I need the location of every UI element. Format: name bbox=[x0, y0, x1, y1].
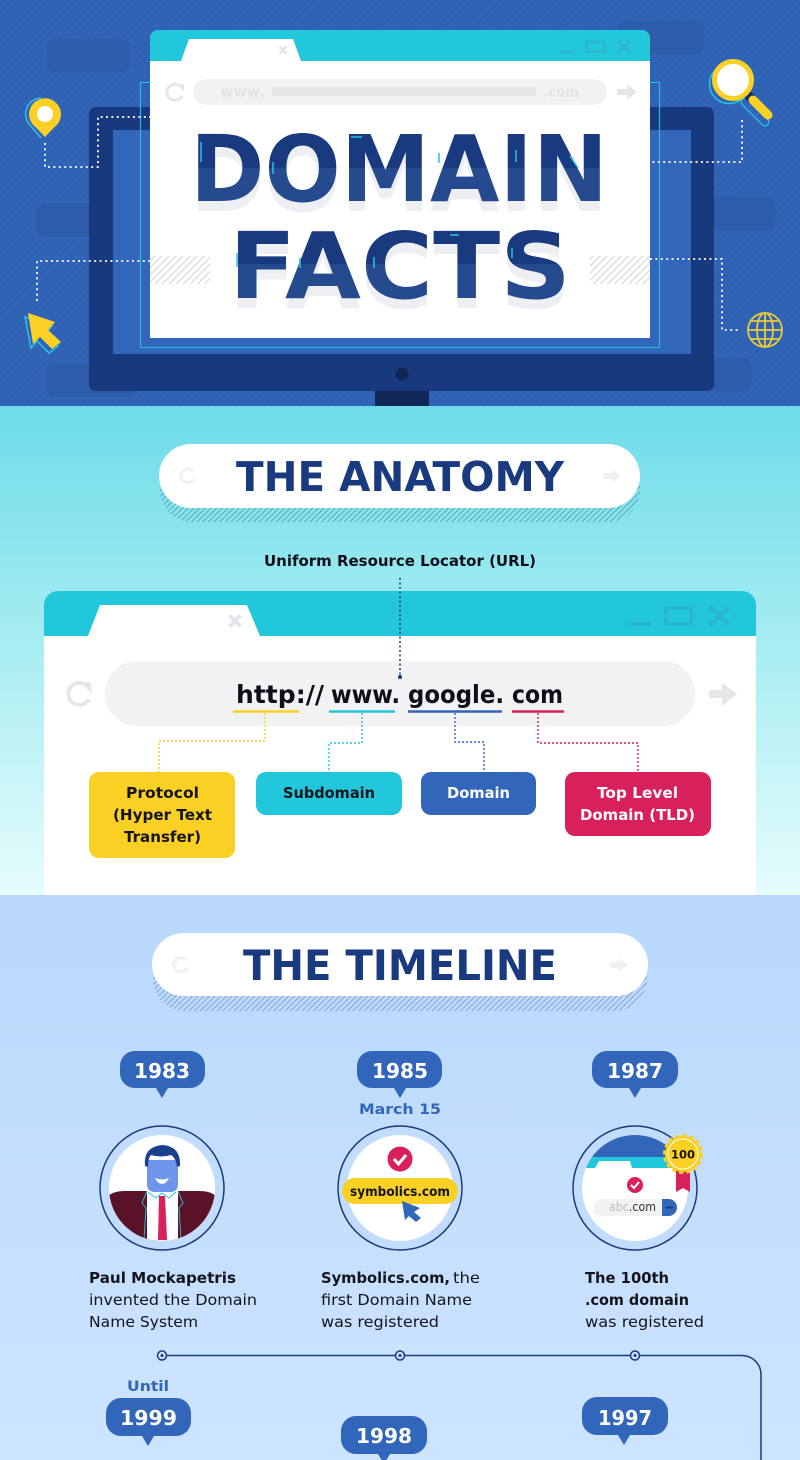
url underlines and connectors bbox=[159, 712, 638, 772]
label box: domain bbox=[421, 772, 536, 815]
icon: cursor bbox=[25, 313, 61, 353]
title: DOMAIN FACTS: FACTS bbox=[229, 213, 571, 320]
text: 1985 bbox=[321, 1269, 480, 1331]
text: 1987 bbox=[585, 1269, 704, 1331]
heading: the anatomy: THE ANATOMY bbox=[236, 453, 565, 501]
text: 1985: the bbox=[453, 1269, 480, 1287]
text: 1983: invented the Domain bbox=[89, 1291, 257, 1309]
icon: globe bbox=[748, 313, 782, 347]
browser window: .com bbox=[543, 83, 579, 101]
year bubble: 1983: 1983 bbox=[134, 1059, 190, 1083]
label box: domain: Domain bbox=[447, 784, 510, 802]
title: DOMAIN FACTS: FACTS bbox=[229, 223, 571, 330]
label: Until: Until bbox=[127, 1379, 169, 1395]
illustration: 100th domain bbox=[573, 1126, 701, 1250]
heading: the timeline: THE TIMELINE bbox=[243, 941, 557, 990]
label box: top level domain bbox=[565, 772, 711, 836]
illustration: 100th domain: 100 bbox=[671, 1148, 695, 1162]
title: DOMAIN FACTS: FACTS bbox=[229, 213, 571, 320]
label box: subdomain bbox=[256, 772, 402, 815]
dotted connectors bbox=[37, 117, 742, 330]
year bubble: 1987: 1987 bbox=[607, 1059, 663, 1083]
year bubble: 1997: 1997 bbox=[598, 1406, 652, 1430]
illustration: symbolics.com: symbolics.com bbox=[350, 1185, 450, 1200]
illustration: 100th domain: abc.com bbox=[609, 1200, 656, 1214]
title: DOMAIN FACTS: DOMAIN bbox=[190, 116, 608, 223]
text: 1983: Name System bbox=[89, 1313, 198, 1331]
timeline line bbox=[158, 1351, 761, 1460]
url text bbox=[236, 680, 563, 709]
label box: subdomain: Subdomain bbox=[283, 784, 375, 802]
label: URL: Uniform Resource Locator (URL) bbox=[264, 552, 536, 570]
year bubble: 1999: 1999 bbox=[120, 1406, 177, 1430]
text: 1987: .com domain bbox=[585, 1291, 689, 1309]
browser window bbox=[150, 30, 650, 338]
date: March 15: March 15 bbox=[359, 1102, 441, 1118]
year bubble: 1985: 1985 bbox=[372, 1059, 428, 1083]
label box: top level domain: Top Level bbox=[597, 784, 678, 802]
year bubble: 1998 bbox=[341, 1416, 427, 1460]
icon: location pin bbox=[26, 98, 61, 138]
illustration: symbolics.com bbox=[338, 1126, 462, 1250]
label box: protocol: Transfer) bbox=[124, 828, 201, 846]
label box: protocol: Protocol bbox=[126, 784, 199, 802]
label box: protocol: (Hyper Text bbox=[113, 806, 213, 824]
label box: top level domain: Domain (TLD) bbox=[580, 806, 695, 824]
monitor bbox=[89, 107, 714, 406]
heading: the timeline bbox=[152, 933, 648, 1011]
title: DOMAIN FACTS: DOMAIN bbox=[190, 116, 608, 223]
illustration: Paul Mockapetris bbox=[100, 1126, 224, 1250]
panel: hero bbox=[0, 0, 800, 406]
year bubble: 1983 bbox=[120, 1051, 205, 1098]
text: 1985: was registered bbox=[321, 1313, 439, 1331]
browser window: www. bbox=[220, 83, 265, 101]
url text: google. bbox=[408, 680, 504, 709]
icon: magnifier bbox=[710, 62, 768, 122]
text: 1987: was registered bbox=[585, 1313, 704, 1331]
year bubble: 1997 bbox=[582, 1397, 668, 1445]
year bubble: 1985 bbox=[357, 1051, 442, 1098]
url text: com bbox=[512, 680, 563, 709]
text: 1987: The 100th bbox=[585, 1269, 669, 1287]
panel: the timeline bbox=[0, 895, 800, 1460]
text: 1983 bbox=[89, 1269, 257, 1331]
year bubble: 1998: 1998 bbox=[356, 1424, 412, 1448]
text: 1985: first Domain Name bbox=[321, 1291, 472, 1309]
label box: protocol bbox=[89, 772, 235, 858]
heading: the anatomy bbox=[159, 444, 640, 522]
year bubble: 1999 bbox=[106, 1398, 191, 1446]
url text: www. bbox=[331, 680, 400, 709]
browser window: url bbox=[44, 578, 756, 895]
text: 1983: Paul Mockapetris bbox=[89, 1269, 236, 1287]
year bubble: 1987 bbox=[592, 1051, 678, 1098]
text: 1985: Symbolics.com, bbox=[321, 1269, 450, 1287]
panel: the anatomy bbox=[0, 406, 800, 895]
url text: http:// bbox=[236, 680, 325, 709]
title: DOMAIN FACTS bbox=[198, 133, 600, 310]
title: DOMAIN FACTS: DOMAIN bbox=[190, 126, 608, 233]
